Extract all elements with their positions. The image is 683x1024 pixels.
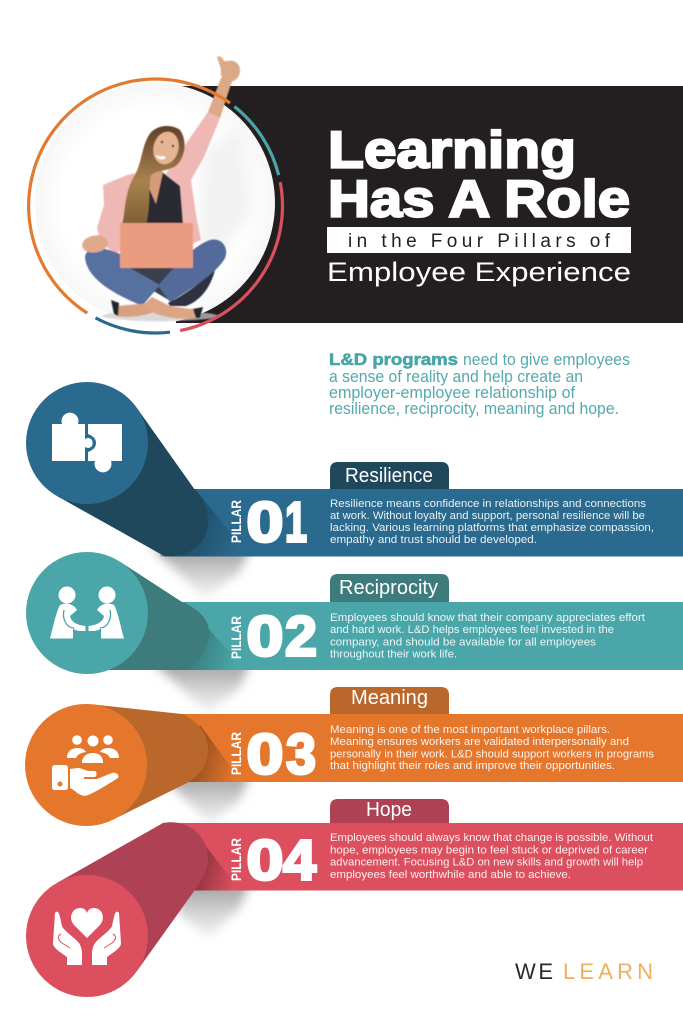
- number 04: 4: [283, 828, 316, 892]
- drop shadow: [152, 548, 250, 598]
- lap: [128, 266, 192, 302]
- panel: pillar 03 meaning: [25, 687, 683, 826]
- drop shadow: [170, 882, 250, 938]
- band: [170, 823, 683, 890]
- band fold shading: [185, 725, 242, 782]
- number 03: 0: [246, 722, 284, 786]
- description: [330, 724, 654, 772]
- band: [170, 489, 683, 556]
- pillar label: PILLAR: [228, 732, 244, 775]
- number 01: [246, 490, 307, 554]
- description: [330, 612, 645, 660]
- band fold shading: [190, 845, 240, 890]
- circle: [26, 382, 148, 504]
- description: Employees should always know that change is possible. Without: [330, 832, 653, 844]
- pillar label: PILLAR: [228, 500, 244, 543]
- red arc: [180, 182, 282, 331]
- hand on knee: [81, 233, 109, 255]
- number 03: [246, 722, 316, 786]
- logo: WELEARN: [515, 959, 653, 984]
- number 02: [246, 604, 317, 668]
- face: [150, 129, 182, 167]
- description: employees feel worthwhile and able to achieve.: [330, 869, 571, 881]
- black shirt: [145, 172, 183, 224]
- intro text: [329, 350, 630, 418]
- subtitle bar: in the Four Pillars of: in the Four Pillars of: [348, 231, 611, 252]
- logo: WELEARN: LEARN: [563, 959, 653, 984]
- description: empathy and trust should be developed.: [330, 534, 537, 546]
- subtitle: Employee Experience: Employee Experience: [327, 257, 631, 287]
- feet: [117, 303, 156, 317]
- description: and hard work. L&D helps employees feel invested in the: [330, 624, 614, 636]
- legs: [85, 248, 160, 306]
- cylinder: [57, 408, 208, 556]
- description: advancement. Focusing L&D on new skills and growth will help: [330, 856, 643, 868]
- woman with laptop: [81, 56, 240, 321]
- shin shadow: [168, 266, 216, 306]
- band: [170, 714, 683, 782]
- icon: puzzle: [52, 413, 122, 472]
- panel: pillar 01 resilience: [26, 382, 683, 598]
- pillar label: PILLAR: [228, 838, 244, 881]
- title: Learning Has A Role: [328, 122, 630, 228]
- icon: hands holding heart: [53, 908, 121, 965]
- panel: pillar 04 hope: [26, 799, 683, 997]
- title: Learning Has A Role: Has A Role: [328, 170, 630, 228]
- number 03: 3: [286, 722, 316, 786]
- tab heading: Meaning: [351, 687, 428, 709]
- jacket: [97, 112, 220, 256]
- tab heading: [330, 462, 449, 489]
- description: personally in their work. L&D should support workers in programs: [330, 748, 654, 760]
- ring arcs: [29, 79, 282, 333]
- tab heading: [330, 799, 449, 823]
- wall shadow: [198, 130, 252, 262]
- pillar label: PILLAR: [228, 616, 244, 659]
- neck: [148, 166, 163, 204]
- description: Meaning is one of the most important workplace pillars.: [330, 724, 610, 736]
- intro text: a sense of reality and help create an: [329, 368, 583, 386]
- cylinder: [57, 822, 208, 971]
- number 01: 0: [246, 490, 284, 554]
- number 02: 2: [285, 604, 317, 668]
- description: Meaning ensures workers are validated interpersonally and: [330, 736, 629, 748]
- title: Learning Has A Role: Learning: [328, 122, 576, 180]
- number 04: [246, 828, 316, 892]
- raised arm: [208, 78, 232, 118]
- tab heading: [330, 574, 449, 602]
- band fold shading: [165, 602, 245, 670]
- photo circle with woman: [35, 56, 275, 323]
- circle: [26, 875, 148, 997]
- tab heading: Reciprocity: [339, 577, 438, 599]
- description: [330, 832, 653, 881]
- panel: pillar 02 reciprocity: [26, 552, 683, 712]
- cylinder: [87, 562, 209, 670]
- description: that highlight their roles and improve their opportunities.: [330, 760, 615, 772]
- icon: two people shaking hands: [50, 586, 124, 638]
- floor shadow: [102, 311, 218, 321]
- logo: WELEARN: WE: [515, 959, 553, 984]
- band fold shading: [160, 489, 250, 556]
- intro text: need to give employees: [463, 351, 630, 369]
- description: lacking. Various learning platforms that emphasize compassion,: [330, 522, 654, 534]
- blue arc: [96, 318, 170, 333]
- icon: hand holding people: [52, 735, 119, 796]
- black title panel: [176, 86, 683, 323]
- hair: [122, 126, 185, 225]
- intro text: employer-employee relationship of: [329, 384, 575, 402]
- description: company, and should be available for all employees: [330, 636, 596, 648]
- description: hope, employees may begin to feel stuck or deprived of career: [330, 844, 648, 856]
- drop shadow: [152, 662, 250, 712]
- circle: [26, 552, 148, 674]
- subtitle bar: in the Four Pillars of: [327, 227, 631, 253]
- number 04: 0: [246, 828, 284, 892]
- circle: [25, 704, 147, 826]
- cylinder: [86, 704, 208, 820]
- description: at work. Without loyalty and support, personal resilience will be: [330, 510, 645, 522]
- orange arc: [29, 79, 230, 313]
- white disc: [35, 83, 275, 323]
- number 01: 1: [285, 490, 307, 554]
- description: [330, 498, 654, 546]
- teal arc: [234, 106, 279, 175]
- tab heading: Resilience: [345, 465, 433, 487]
- intro text: resilience, reciprocity, meaning and hope.: [329, 400, 619, 418]
- tab heading: Hope: [366, 799, 412, 821]
- number 02: 0: [246, 604, 284, 668]
- description: Resilience means confidence in relationships and connections: [330, 498, 646, 510]
- intro text: L&D programs: [329, 350, 458, 369]
- tab heading: [330, 687, 449, 714]
- drop shadow: [160, 774, 250, 824]
- header banner: [176, 86, 683, 323]
- laptop: [120, 223, 193, 268]
- description: throughout their work life.: [330, 648, 457, 660]
- band: [170, 602, 683, 670]
- description: Employees should know that their company appreciates effort: [330, 612, 645, 624]
